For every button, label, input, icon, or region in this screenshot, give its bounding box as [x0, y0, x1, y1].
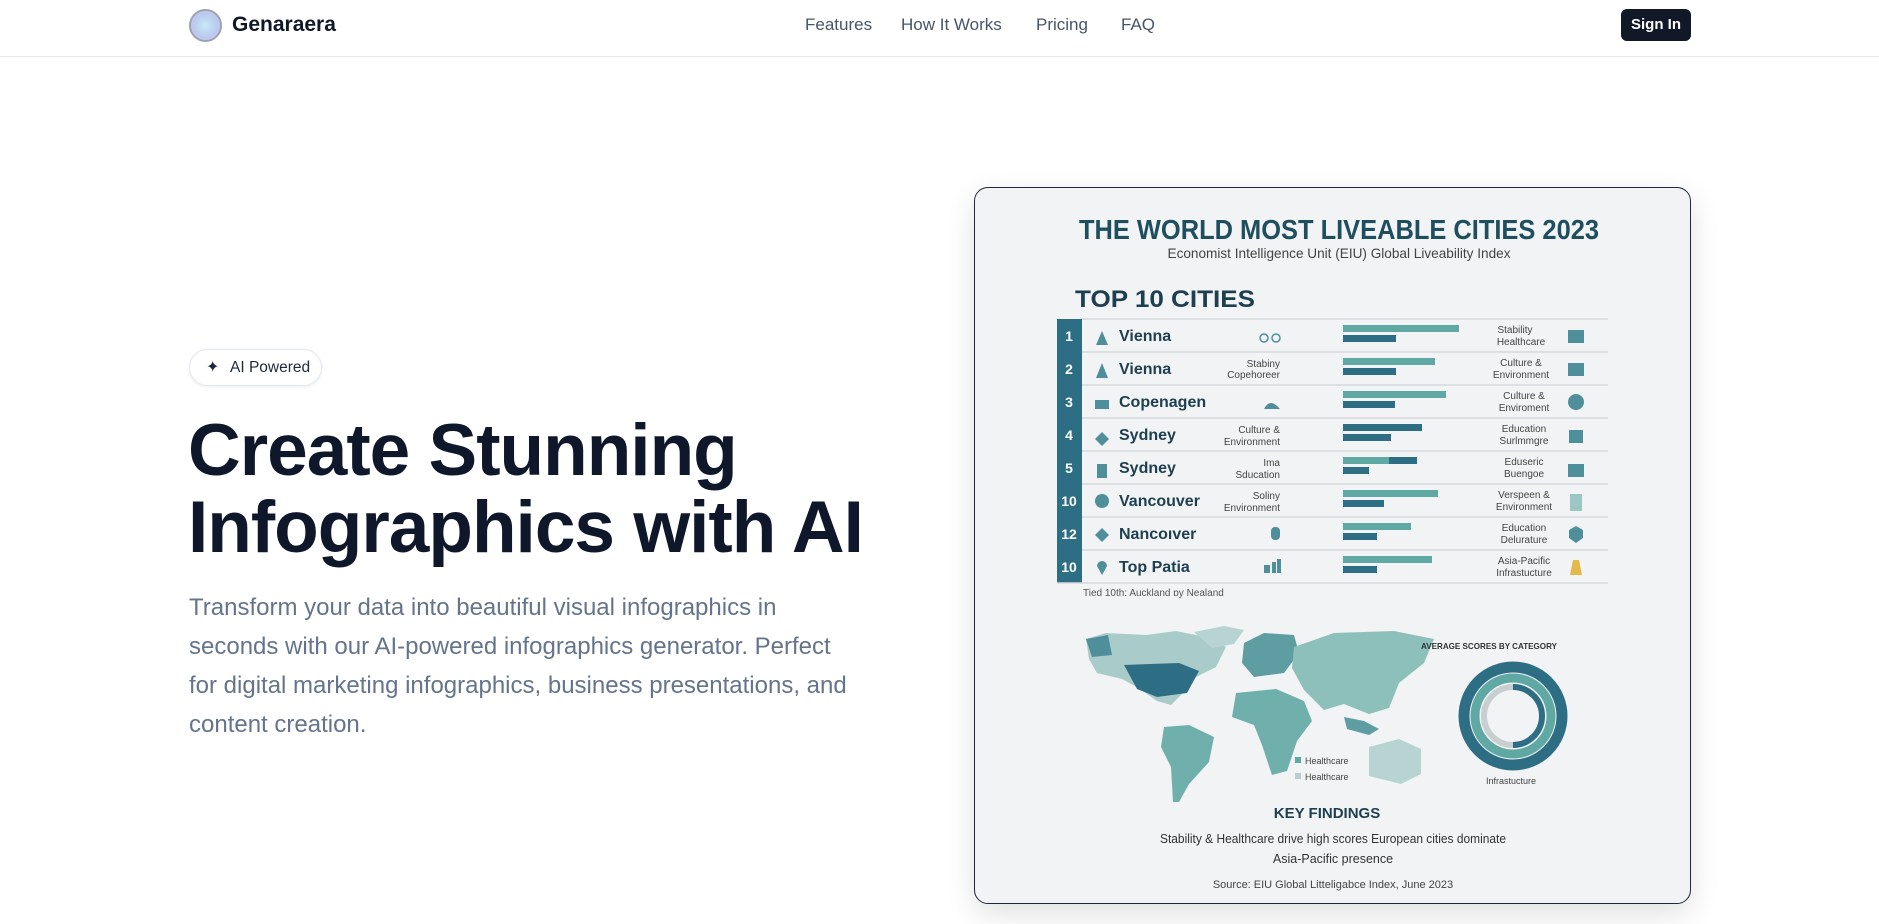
hero heading: Create Stunning: [188, 410, 737, 491]
ranking table: Buengoe: [1504, 469, 1544, 480]
key findings: Stability & Healthcare drive high scores European cities dominate: [1160, 832, 1506, 846]
nav links: Features: [805, 15, 872, 34]
infographic card: [974, 187, 1691, 904]
ranking table: Environment: [1224, 437, 1280, 448]
hero heading: [188, 410, 863, 568]
map legend: [1295, 756, 1349, 782]
subtitle: Economist Intelligence Unit (EIU) Global Liveability Index: [1168, 245, 1510, 261]
sign in button: [1621, 9, 1691, 41]
ranking table: Eduseric: [1505, 457, 1543, 468]
badge: AI Powered: AI Powered: [230, 359, 310, 376]
ranking table: Stabiny: [1247, 359, 1280, 370]
infographic title: THE WORLD MOST LIVEABLE CITIES 2023: [1079, 214, 1599, 245]
ranking table: Culture &: [1503, 391, 1545, 402]
key findings: KEY FINDINGS: [1274, 805, 1380, 822]
section heading: top 10: TOP 10 CITIES: [1075, 286, 1255, 313]
donut chart: average scores: AVERAGE SCORES BY CATEGORY: [1421, 641, 1557, 651]
hero heading: Infographics with AI: [188, 487, 863, 568]
ranking table: 1: [1065, 328, 1073, 344]
ranking table: Sducation: [1236, 470, 1280, 481]
ranking table: Culture &: [1238, 425, 1280, 436]
icon: sparkle: ✦: [206, 359, 219, 376]
ranking table: Education: [1502, 424, 1546, 435]
ranking table: Copenagen: [1119, 394, 1206, 411]
key findings: Asia-Pacific presence: [1273, 852, 1393, 866]
ranking table: Healthcare: [1497, 337, 1546, 348]
ranking table: Surlmmgre: [1500, 436, 1549, 447]
nav links: FAQ: [1121, 15, 1155, 34]
key findings: Source: EIU Global Litteligabce Index, June 2023: [1213, 879, 1453, 891]
donut chart: average scores: Infrastucture: [1486, 776, 1536, 786]
ranking table: Environment: [1496, 502, 1552, 513]
ranking table: Environment: [1224, 503, 1280, 514]
ranking table: Top Patia: [1119, 559, 1190, 576]
ranking table: Asia-Pacific: [1498, 556, 1550, 567]
nav links: Pricing: [1036, 15, 1088, 34]
key findings: [1160, 805, 1506, 891]
ranking table: 10: [1061, 559, 1077, 575]
nav links: How It Works: [901, 15, 1002, 34]
ranking table: Culture &: [1500, 358, 1542, 369]
donut chart: average scores: [1421, 641, 1562, 786]
ranking table: 10: [1061, 493, 1077, 509]
logo icon: [189, 9, 222, 42]
sign in button: Sign In: [1631, 16, 1681, 33]
ranking table: 3: [1065, 394, 1073, 410]
ranking table: Vancouver: [1119, 493, 1200, 510]
ranking table: 5: [1065, 460, 1073, 476]
ranking table: Nancoıver: [1119, 526, 1196, 543]
hero paragraph: Transform your data into beautiful visual infographics in seconds with our AI-powered infographics generator. Perfect for digital marketing infographics, business presentations, and content creation.: [189, 594, 847, 738]
ranking table: Ima: [1263, 458, 1280, 469]
ranking table: Vienna: [1119, 361, 1171, 378]
ranking table: Sydney: [1119, 427, 1176, 444]
ranking table: Stability: [1497, 325, 1533, 336]
map legend: Healthcare: [1305, 756, 1349, 766]
ranking table: Environment: [1493, 370, 1549, 381]
ranking table: 12: [1061, 526, 1077, 542]
badge: AI Powered: [189, 349, 322, 386]
ranking table: Education: [1502, 523, 1546, 534]
brand name: Genaraera: [232, 13, 336, 36]
ranking table: Soliny: [1253, 491, 1280, 502]
ranking table: Delurature: [1501, 535, 1548, 546]
nav links: [805, 15, 1155, 34]
navbar: [0, 0, 1879, 57]
ranking table: Copehoreer: [1227, 370, 1281, 381]
ranking table: Verspeen &: [1498, 490, 1550, 501]
ranking table: Enviroment: [1499, 403, 1550, 414]
footnote: Tied 10th: Auckland ɒy Nealand: [1083, 588, 1224, 599]
ranking table: Sydney: [1119, 460, 1176, 477]
world map: [1086, 626, 1434, 802]
ranking table: Vienna: [1119, 328, 1171, 345]
ranking table: 4: [1065, 427, 1073, 443]
ranking table: [1057, 319, 1608, 583]
ranking table: Infrastucture: [1496, 568, 1552, 579]
ranking table: 2: [1065, 361, 1073, 377]
map legend: Healthcare: [1305, 772, 1349, 782]
